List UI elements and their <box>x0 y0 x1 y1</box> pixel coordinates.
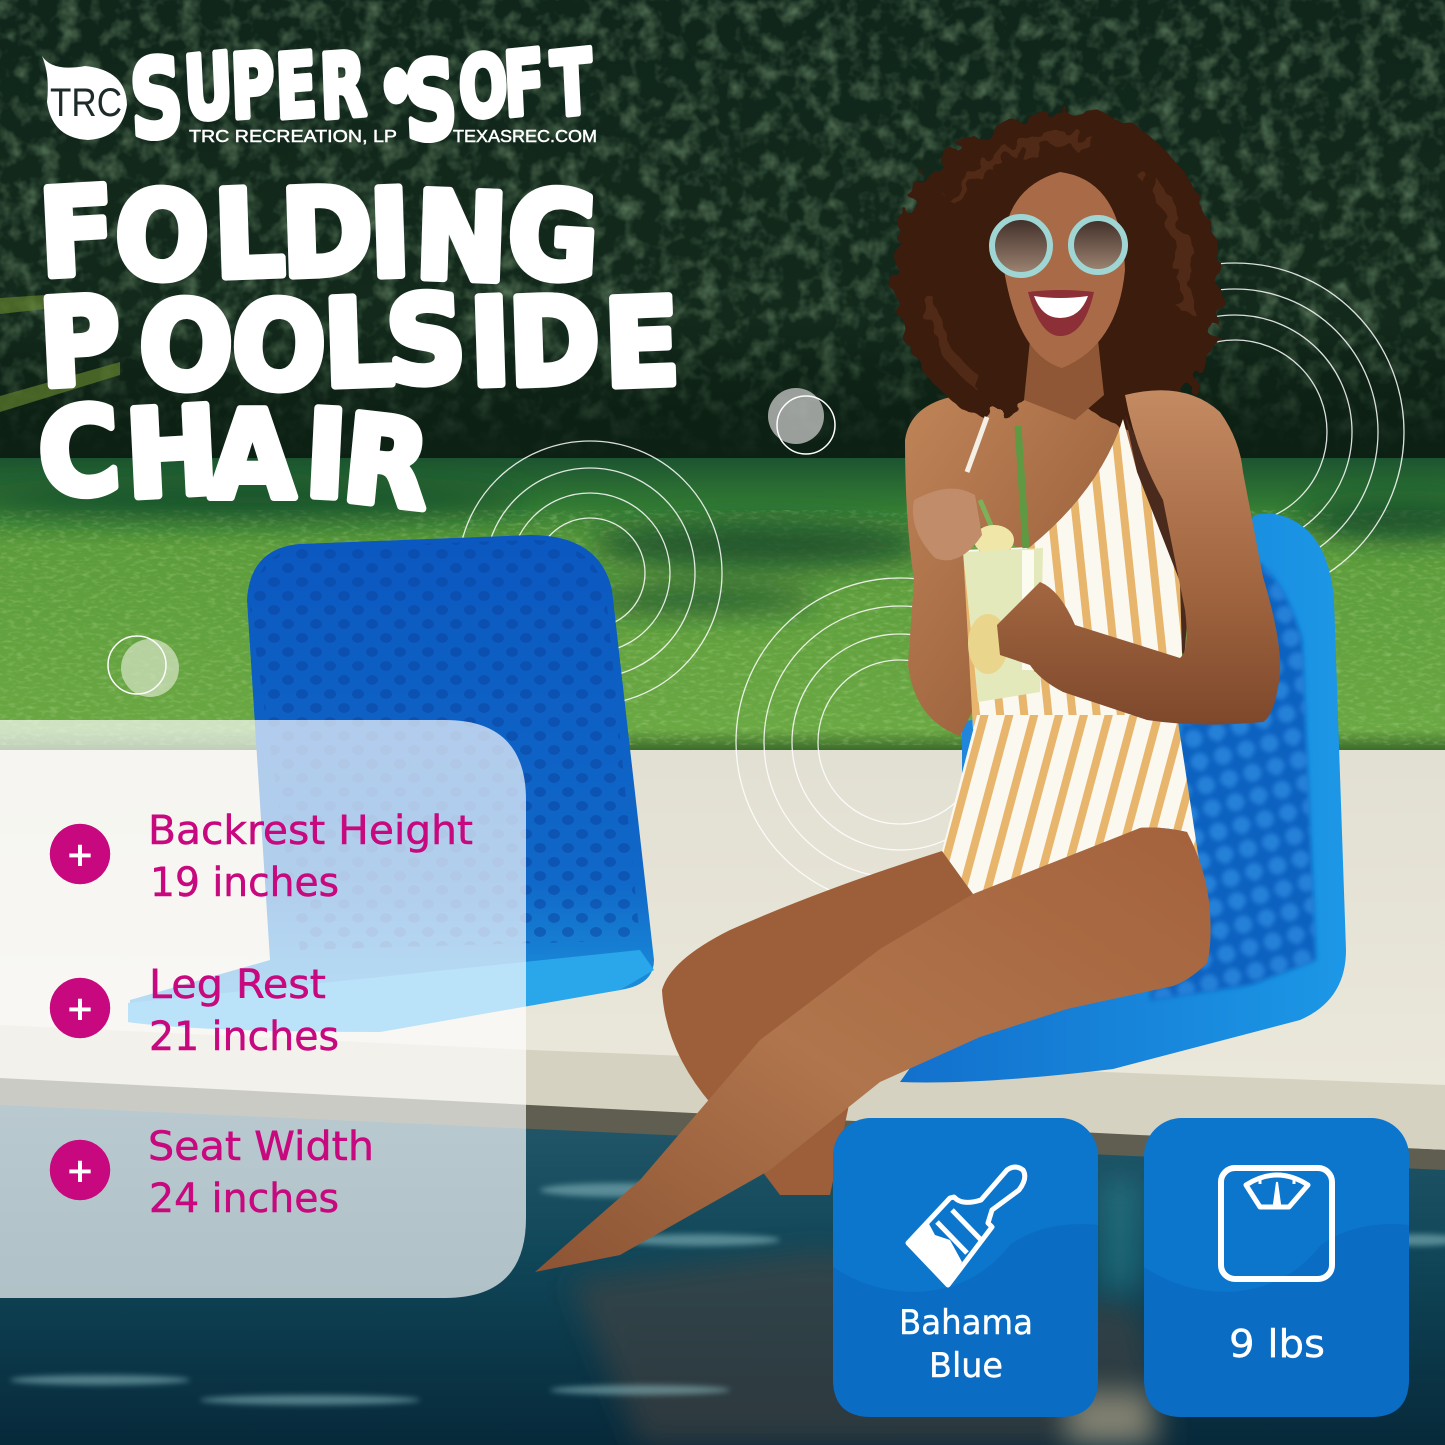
logo: TRC Super Soft: P <box>229 33 276 139</box>
label: Bahama Blue: Blue <box>929 1346 1003 1386</box>
drink <box>963 426 1043 702</box>
icon: plus seat width: + <box>66 1151 94 1191</box>
swimsuit <box>942 417 1200 894</box>
smile <box>1028 290 1094 336</box>
icon: plus seat width <box>50 1140 110 1200</box>
logo: TRC Super Soft: • <box>377 37 416 141</box>
title <box>34 162 682 538</box>
text: leg rest: Leg Rest <box>149 962 326 1008</box>
card: weight 9 lbs <box>1144 1118 1409 1417</box>
text: backrest height: Backrest Height <box>148 808 473 854</box>
decorative bubble: upper <box>768 388 835 454</box>
chair under the model <box>900 514 1346 1082</box>
text: seat width: Seat Width <box>148 1124 374 1170</box>
logo: TRC Super Soft: TEXASREC.COM <box>453 126 597 146</box>
near arm <box>997 390 1280 725</box>
near leg <box>535 828 1211 1272</box>
decorative rings: left chair <box>458 441 722 705</box>
title: POOLSIDE <box>36 269 682 419</box>
logo: TRC Super Soft: O <box>457 35 510 138</box>
text: backrest height: 19 inches <box>150 860 339 906</box>
face <box>1003 172 1125 368</box>
logo: TRC Super Soft: TRC RECREATION, LP <box>189 126 397 146</box>
logo: TRC Super Soft: S <box>127 33 186 165</box>
text: backrest height <box>148 808 473 906</box>
title: CHAIR <box>34 381 436 538</box>
icon: plus backrest: + <box>66 835 94 875</box>
logo: TRC Super Soft: S <box>401 35 460 167</box>
text: leg rest: 21 inches <box>149 1014 339 1060</box>
logo: TRC Super Soft: E <box>274 33 318 139</box>
decorative bubble: left <box>108 636 179 697</box>
text: seat width: 24 inches <box>149 1176 339 1222</box>
icon: paint brush <box>908 1167 1025 1285</box>
icon: plus leg rest: + <box>66 989 94 1029</box>
hair <box>895 111 1220 432</box>
logo: TRC Super Soft: TRC <box>50 81 122 125</box>
near hand <box>913 489 982 560</box>
torso side shadow <box>1125 415 1188 660</box>
title: FOLDING <box>36 162 602 310</box>
text: leg rest <box>149 962 339 1060</box>
icon: plus backrest <box>50 824 110 884</box>
folded chair product <box>128 535 654 1032</box>
model in swimsuit with drink <box>535 111 1280 1272</box>
sunglasses <box>992 217 1125 275</box>
logo drop <box>42 56 127 140</box>
label: Bahama Blue <box>899 1303 1033 1386</box>
icon: plus leg rest <box>50 978 110 1038</box>
label: Bahama Blue: Bahama <box>899 1303 1033 1343</box>
text: seat width <box>148 1124 374 1222</box>
chest and far arm <box>905 395 1140 736</box>
label: 9 lbs: 9 lbs <box>1229 1322 1325 1366</box>
decorative rings: centre <box>736 578 1064 906</box>
logo: TRC Super Soft <box>42 30 597 167</box>
far leg <box>662 851 973 1195</box>
logo: TRC Super Soft: R <box>318 33 368 139</box>
logo: TRC Super Soft: F <box>501 30 547 137</box>
logo: TRC Super Soft: T <box>549 30 595 137</box>
icon: bathroom scale <box>1221 1168 1332 1279</box>
panel: dimensions <box>0 720 526 1298</box>
decorative rings: right <box>1066 263 1404 601</box>
neck <box>1024 340 1104 420</box>
logo: TRC Super Soft: U <box>182 33 235 141</box>
card: colour Bahama Blue <box>833 1118 1098 1417</box>
